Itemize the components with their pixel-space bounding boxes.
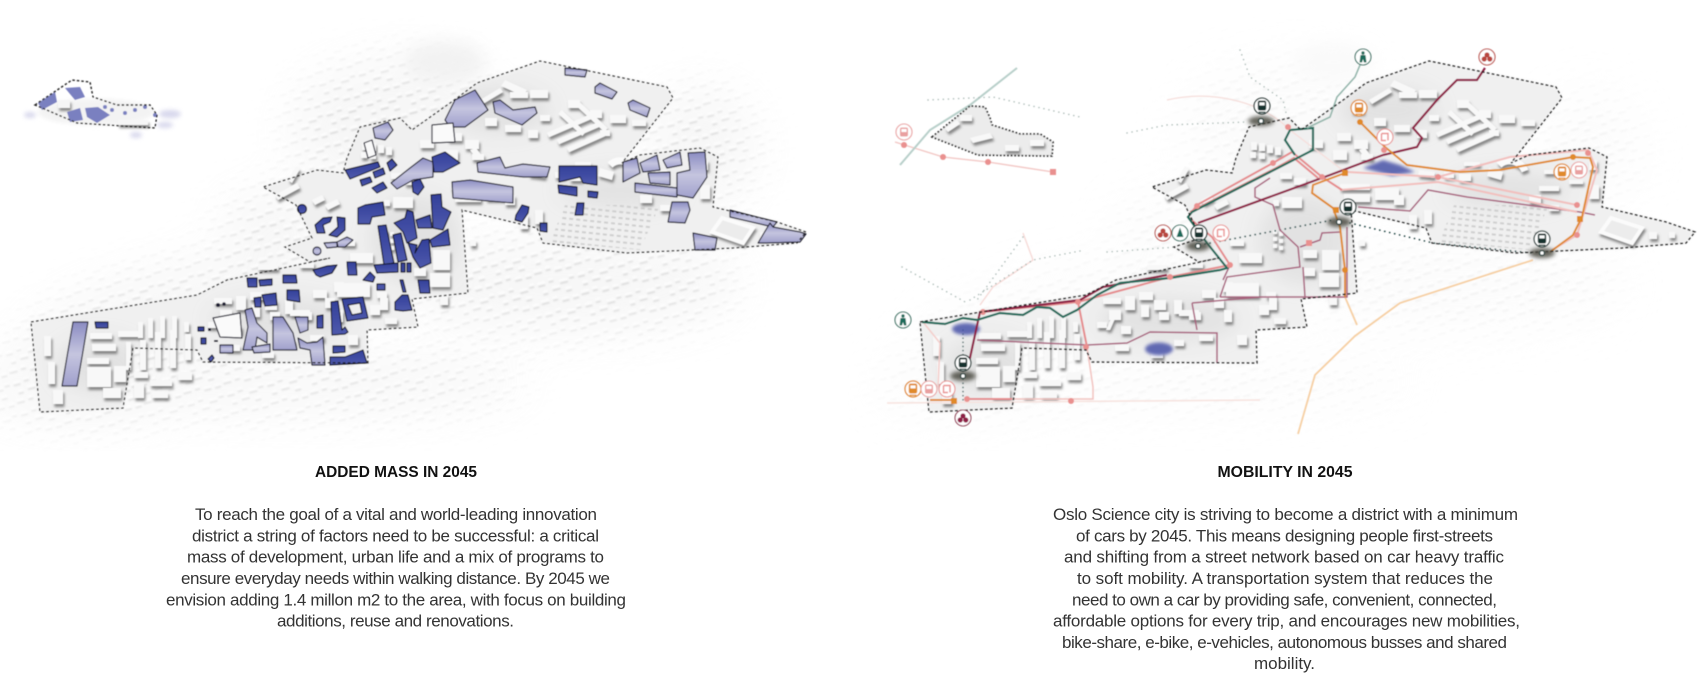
- text block: mobility: of cars by 2045. This means designing people first-streets: [1076, 526, 1493, 545]
- no label: small campus blocks: [945, 115, 1044, 151]
- hollow white building outlines: [213, 123, 455, 338]
- pale connection lines: [887, 68, 1533, 434]
- text block: added mass: district a string of factors need to be successful: a critical: [192, 526, 599, 545]
- district boundary: [920, 61, 1695, 412]
- text block: mobility: bike-share, e-bike, e-vehicles, autonomous busses and shared: [1062, 633, 1507, 652]
- text block: mobility: to soft mobility. A transportation system that reduces the: [1077, 569, 1493, 588]
- surrounding city context: [0, 0, 890, 450]
- text block: mobility: mobility.: [1254, 654, 1315, 673]
- pink tram route: [967, 152, 1342, 399]
- text block: added mass: additions, reuse and renovations.: [277, 612, 514, 631]
- detached campus at top left: [24, 80, 181, 138]
- text block: added mass: mass of development, urban life and a mix of programs to: [187, 548, 604, 567]
- no label: tiny marks: [208, 302, 226, 342]
- icons: metro: [905, 100, 1570, 397]
- rail station halos: [950, 116, 1555, 381]
- text block: added mass: To reach the goal of a vital and world-leading innovation: [195, 505, 597, 524]
- panel: added mass map: [0, 0, 890, 450]
- added buildings: existing rework, light: [62, 68, 806, 386]
- pale green trail to walker icon: [1307, 65, 1360, 128]
- text block: added mass: ensure everyday needs within walking distance. By 2045 we: [181, 569, 610, 588]
- text block: mobility: and shifting from a street network based on car heavy traffic: [1064, 548, 1504, 567]
- heading: added mass: ADDED MASS IN 2045: [315, 464, 477, 481]
- icons: tram and bus: [896, 124, 1587, 397]
- text block: mobility: Oslo Science city is striving to become a district with a minimum: [1053, 505, 1518, 524]
- small campus base: [932, 106, 1053, 156]
- pedestrian priority blobs in blue: [952, 160, 1415, 356]
- text block: mobility: need to own a car by providing safe, convenient, connected,: [1072, 590, 1497, 609]
- icons: regional train: [955, 98, 1550, 371]
- district base massing: [920, 61, 1695, 412]
- small campus dashed outline: [932, 106, 1053, 156]
- station nodes: [901, 124, 1591, 404]
- heading: mobility: MOBILITY IN 2045: [1218, 464, 1353, 481]
- pale pink arterial lines: [1340, 150, 1597, 250]
- text block: added mass: envision adding 1.4 millon m2 to the area, with focus on building: [166, 590, 626, 609]
- text block: added mass: [166, 505, 626, 631]
- icons: walking and nature: [895, 49, 1371, 328]
- icons: bike share: [939, 129, 1393, 397]
- added buildings: new mass, dark blue: [95, 152, 598, 365]
- icons: woodland: [955, 49, 1495, 426]
- dotted walking routes: [902, 50, 1533, 400]
- district boundary: [31, 61, 806, 412]
- text block: mobility: affordable options for every trip, and encourages new mobilities,: [1053, 612, 1520, 631]
- panel: mobility map: [849, 0, 1700, 450]
- text block: mobility: [1053, 505, 1520, 673]
- orange metro line: [930, 122, 1593, 400]
- orange nodes: [951, 119, 1583, 404]
- secondary street network in mauve: [977, 178, 1595, 363]
- green park path: [922, 128, 1313, 324]
- crimson main street: [968, 68, 1485, 367]
- surrounding city context: [849, 0, 1700, 450]
- station centres: [961, 119, 1544, 378]
- district base massing: [31, 61, 806, 412]
